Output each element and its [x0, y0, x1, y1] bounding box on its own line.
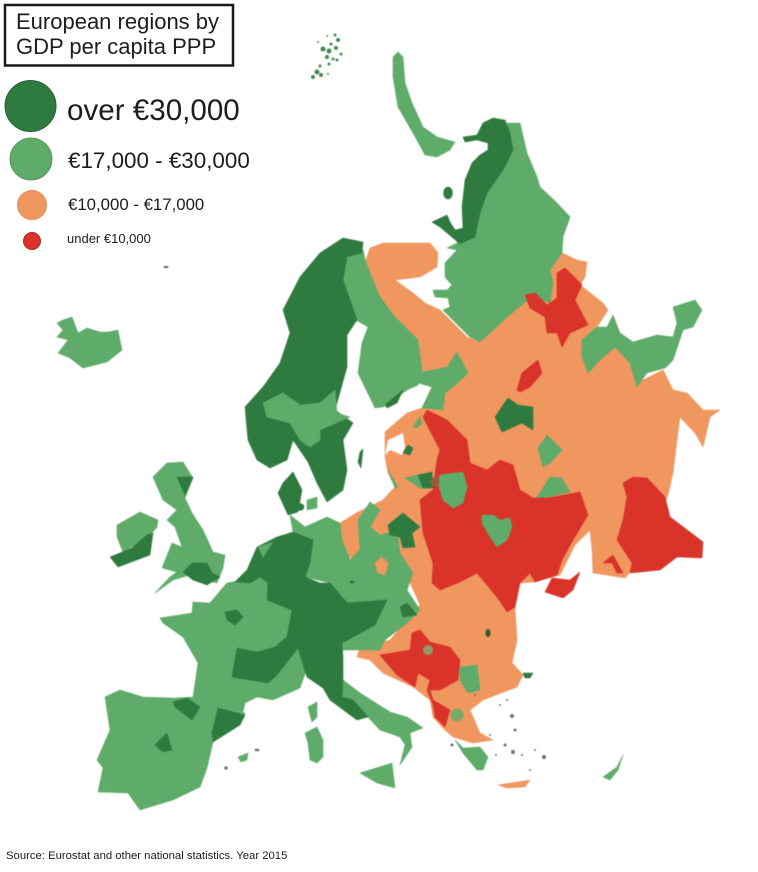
Corsica [308, 702, 317, 722]
legend item: 17,000 to 30,000 [10, 138, 250, 180]
Southern Ireland [110, 533, 153, 567]
Helsinki [385, 390, 403, 408]
Iceland [57, 317, 122, 368]
Green region Voronezh [535, 477, 570, 500]
Madrid [155, 733, 172, 752]
Southern Russia [617, 477, 703, 573]
Red region central Russia [517, 360, 542, 392]
Moscow [495, 398, 533, 432]
Arctic island [444, 187, 452, 199]
Great Britain [153, 462, 225, 593]
legend item: 17,000 to 30,000: €17,000 - €30,000 [68, 148, 250, 173]
Green spot in Latvia [413, 417, 422, 428]
Vilnius dark [418, 472, 433, 488]
legend item: 10,000 to 17,000 [18, 190, 204, 220]
Prague-area orange [375, 557, 388, 575]
Belgrade [423, 645, 433, 655]
Belarus and Ukraine [420, 410, 588, 612]
legend item: over 30,000 [5, 80, 240, 132]
legend item: under 10,000 [24, 231, 151, 250]
Crimea [545, 572, 580, 598]
Jan Mayen [164, 266, 168, 268]
Gulf of Riga [385, 433, 405, 455]
Small dark spot [350, 580, 354, 584]
Riga [403, 445, 413, 455]
map of Europe [57, 34, 720, 810]
Cyprus [603, 755, 623, 780]
Catalonia [212, 708, 245, 742]
legend item: under 10,000: under €10,000 [67, 231, 151, 246]
Bulgaria coast [523, 673, 533, 678]
Norway and Sweden [245, 238, 363, 502]
Sicily [360, 763, 395, 788]
Spain and Portugal [97, 690, 245, 810]
Lithuania coast [388, 470, 398, 488]
legend item: over 30,000: over €30,000 [67, 94, 240, 127]
title: European regions by [16, 9, 219, 34]
Netherlands coast [258, 542, 273, 557]
title [5, 5, 233, 66]
Central Europe: mid green [290, 502, 420, 650]
Paris [225, 610, 243, 625]
Russia main: orange regions [340, 243, 720, 743]
Basque Country [173, 698, 200, 720]
Kyiv [482, 515, 512, 547]
Svalbard [311, 34, 342, 79]
Sofia region [460, 665, 480, 693]
Aberdeen [177, 477, 193, 495]
title: GDP per capita PPP [16, 34, 216, 59]
Western Balkans [380, 630, 460, 727]
Bucharest [486, 629, 490, 637]
Denmark [278, 472, 302, 515]
Volga-Urals: mid green [582, 300, 702, 387]
Gotland [358, 449, 363, 468]
Benelux, Germany, Switzerland, Austria, north Italy [232, 532, 387, 720]
Crete [498, 780, 530, 788]
Sardinia [305, 727, 323, 763]
Kaliningrad brown spot [430, 478, 440, 486]
Copenhagen [296, 504, 304, 510]
Balearic islands [224, 749, 260, 770]
Greece [455, 740, 488, 770]
Krasnodar sliver [603, 555, 623, 573]
London [183, 563, 220, 585]
Green region south of Moscow [538, 435, 562, 467]
Warsaw [388, 513, 420, 548]
legend [5, 80, 250, 250]
Bratislava [400, 603, 417, 617]
Thessaloniki [450, 708, 464, 722]
Danish islands [307, 497, 317, 510]
Italy [342, 680, 423, 765]
Arctic Russia: dark green [432, 118, 513, 244]
Ireland [117, 512, 158, 552]
Greek islands [450, 694, 546, 771]
St Petersburg and Estonia [418, 352, 468, 410]
legend item: 10,000 to 17,000: €10,000 - €17,000 [68, 195, 204, 214]
Novaya Zemlya [393, 52, 455, 157]
Minsk [438, 472, 467, 508]
Vilnius green [405, 475, 430, 488]
Red region north-east [525, 268, 588, 347]
North-east Russia: mid green [433, 123, 570, 342]
Vilnius and Kaliningrad [405, 472, 440, 488]
South Norway and Sweden [263, 390, 350, 447]
France [160, 577, 310, 712]
source note: Source: Eurostat and other national statistics. Year 2015 [6, 850, 287, 862]
Finland [343, 250, 422, 408]
